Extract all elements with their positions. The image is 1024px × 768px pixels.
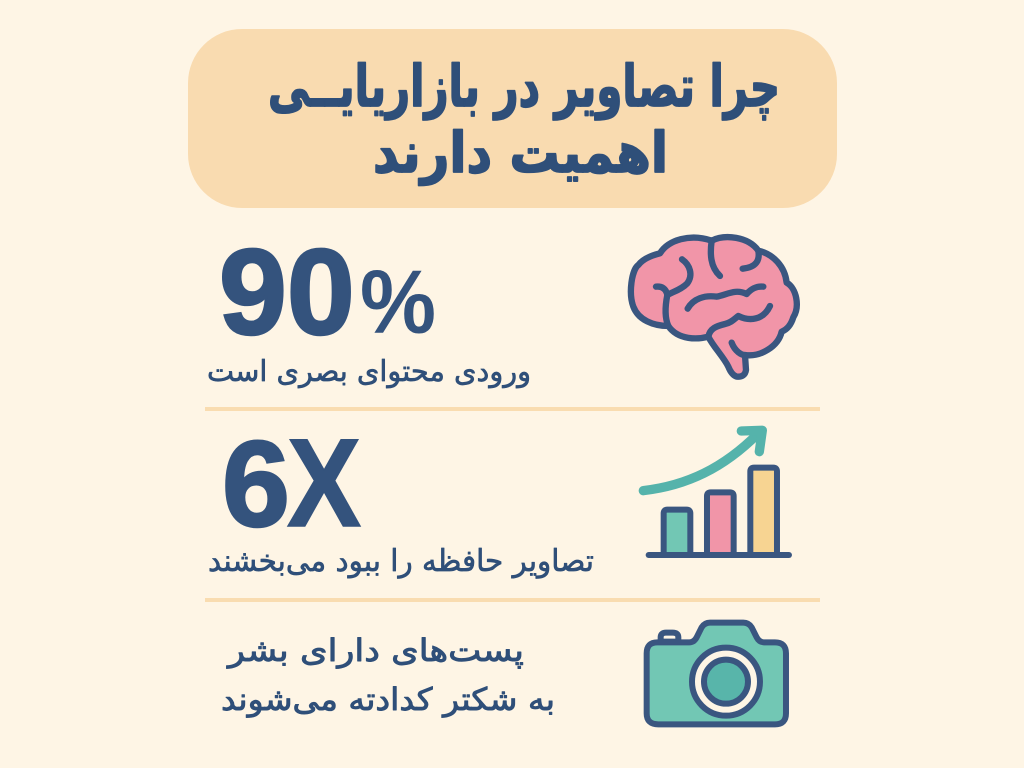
title: چرا تصاویر در بازاریایــی [268,54,780,120]
number: 90% [219,224,436,360]
caption line 2: به شکتر کدادته می‌شوند [221,682,555,718]
stat: posts with images [221,633,555,718]
bars [649,468,789,555]
title panel [188,29,837,208]
icon: bar chart with rising arrow [643,430,789,555]
stat: 90% [207,224,531,388]
icon: brain [631,237,797,377]
number: 90%: % [360,253,436,353]
camera body [647,623,786,724]
title [268,54,780,186]
lens [692,648,760,716]
arrow [643,430,762,491]
caption: visual input: ورودی محتوای بصری است [207,354,531,388]
number: 6X [222,414,361,553]
number: 6X: 6 [222,416,290,552]
number: 90%: 90 [219,224,355,360]
title: اهمیت دارند [373,121,668,186]
number: 6X: X [287,414,361,553]
divider [205,407,820,411]
icon: camera [647,623,786,724]
stat: 6X [208,414,594,579]
shutter button [661,633,678,642]
caption: memory: تصاویر حافظه را ببود می‌بخشند [208,544,594,579]
caption line 1: پست‌های دارای بشر [226,633,524,669]
divider [205,598,820,602]
